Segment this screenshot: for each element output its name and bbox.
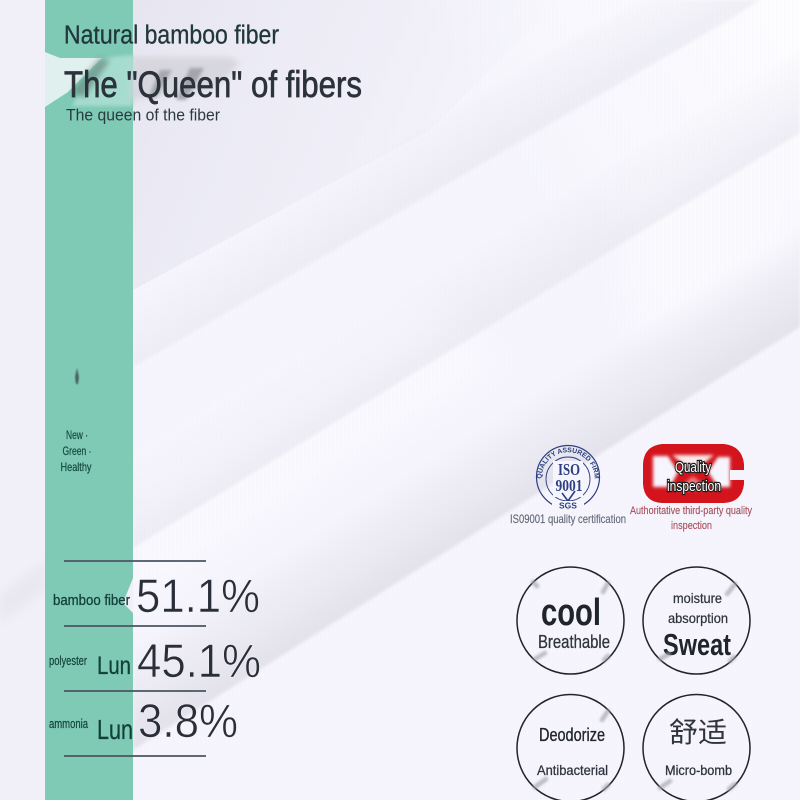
ISO 9001 badge: QUALITY ASSURED FIRM <box>537 448 599 478</box>
quality inspection badge: Quality <box>675 460 712 476</box>
row: polyester <box>49 634 261 687</box>
ISO 9001 badge: SGS <box>559 500 577 510</box>
fold shadow behind headline <box>130 57 240 100</box>
band tagline: new green healthy: Green · <box>62 444 92 458</box>
row: polyester: 45.1% <box>137 634 261 687</box>
row: polyester: polyester <box>49 654 87 668</box>
composition table <box>49 561 261 756</box>
row: bamboo fiber: bamboo fiber <box>53 592 130 609</box>
band tagline: new green healthy <box>60 428 92 474</box>
badge: cool breathable: Breathable <box>538 632 610 652</box>
row: ammonia: ammonia <box>49 717 88 731</box>
subtitle: natural bamboo fiber: Natural bamboo fiber <box>64 22 279 50</box>
quality inspection caption: inspection <box>671 520 712 532</box>
badge: deodorize antibacterial <box>517 694 624 800</box>
badge: moisture absorption sweat: absorption <box>668 610 728 626</box>
heading: the queen of fibers: The "Queen" of fibers <box>64 64 362 105</box>
ISO caption: IS09001 quality certification <box>510 512 626 526</box>
title block <box>64 22 362 124</box>
circle frame smudges <box>533 582 735 789</box>
row: polyester: Lun <box>97 652 131 680</box>
badge: moisture absorption sweat <box>643 567 750 674</box>
badge: comfort micro-bomb: 舒适 <box>669 717 727 748</box>
green vertical band <box>45 0 133 800</box>
ISO 9001 badge <box>536 444 600 510</box>
quality inspection badge: inspection <box>667 479 721 495</box>
row: ammonia: Lun <box>97 714 133 745</box>
row: bamboo fiber: 51.1% <box>136 569 260 622</box>
quality inspection badge <box>643 444 744 503</box>
badge: cool breathable: cool <box>541 592 601 634</box>
small mark above tagline <box>75 368 79 384</box>
row: bamboo fiber <box>53 569 260 622</box>
badge: deodorize antibacterial: Deodorize <box>539 725 605 745</box>
badge: comfort micro-bomb: Micro-bomb <box>665 762 732 778</box>
quality inspection caption: Authoritative third-party quality <box>630 505 752 517</box>
row: ammonia <box>49 694 238 747</box>
badge: moisture absorption sweat: Sweat <box>663 627 731 662</box>
row: ammonia: 3.8% <box>138 694 238 747</box>
quality inspection caption <box>630 505 752 532</box>
badge: comfort micro-bomb <box>643 694 750 800</box>
badge: cool breathable <box>517 567 624 674</box>
band tagline: new green healthy: New · <box>66 428 88 442</box>
badge: moisture absorption sweat: moisture <box>673 590 722 606</box>
ISO 9001 badge: 9001 <box>556 476 582 495</box>
badge: deodorize antibacterial: Antibacterial <box>537 762 608 778</box>
band tagline: new green healthy: Healthy <box>60 460 92 474</box>
ISO 9001 badge: ISO <box>558 460 580 479</box>
tagline: The queen of the fiber <box>66 106 220 124</box>
